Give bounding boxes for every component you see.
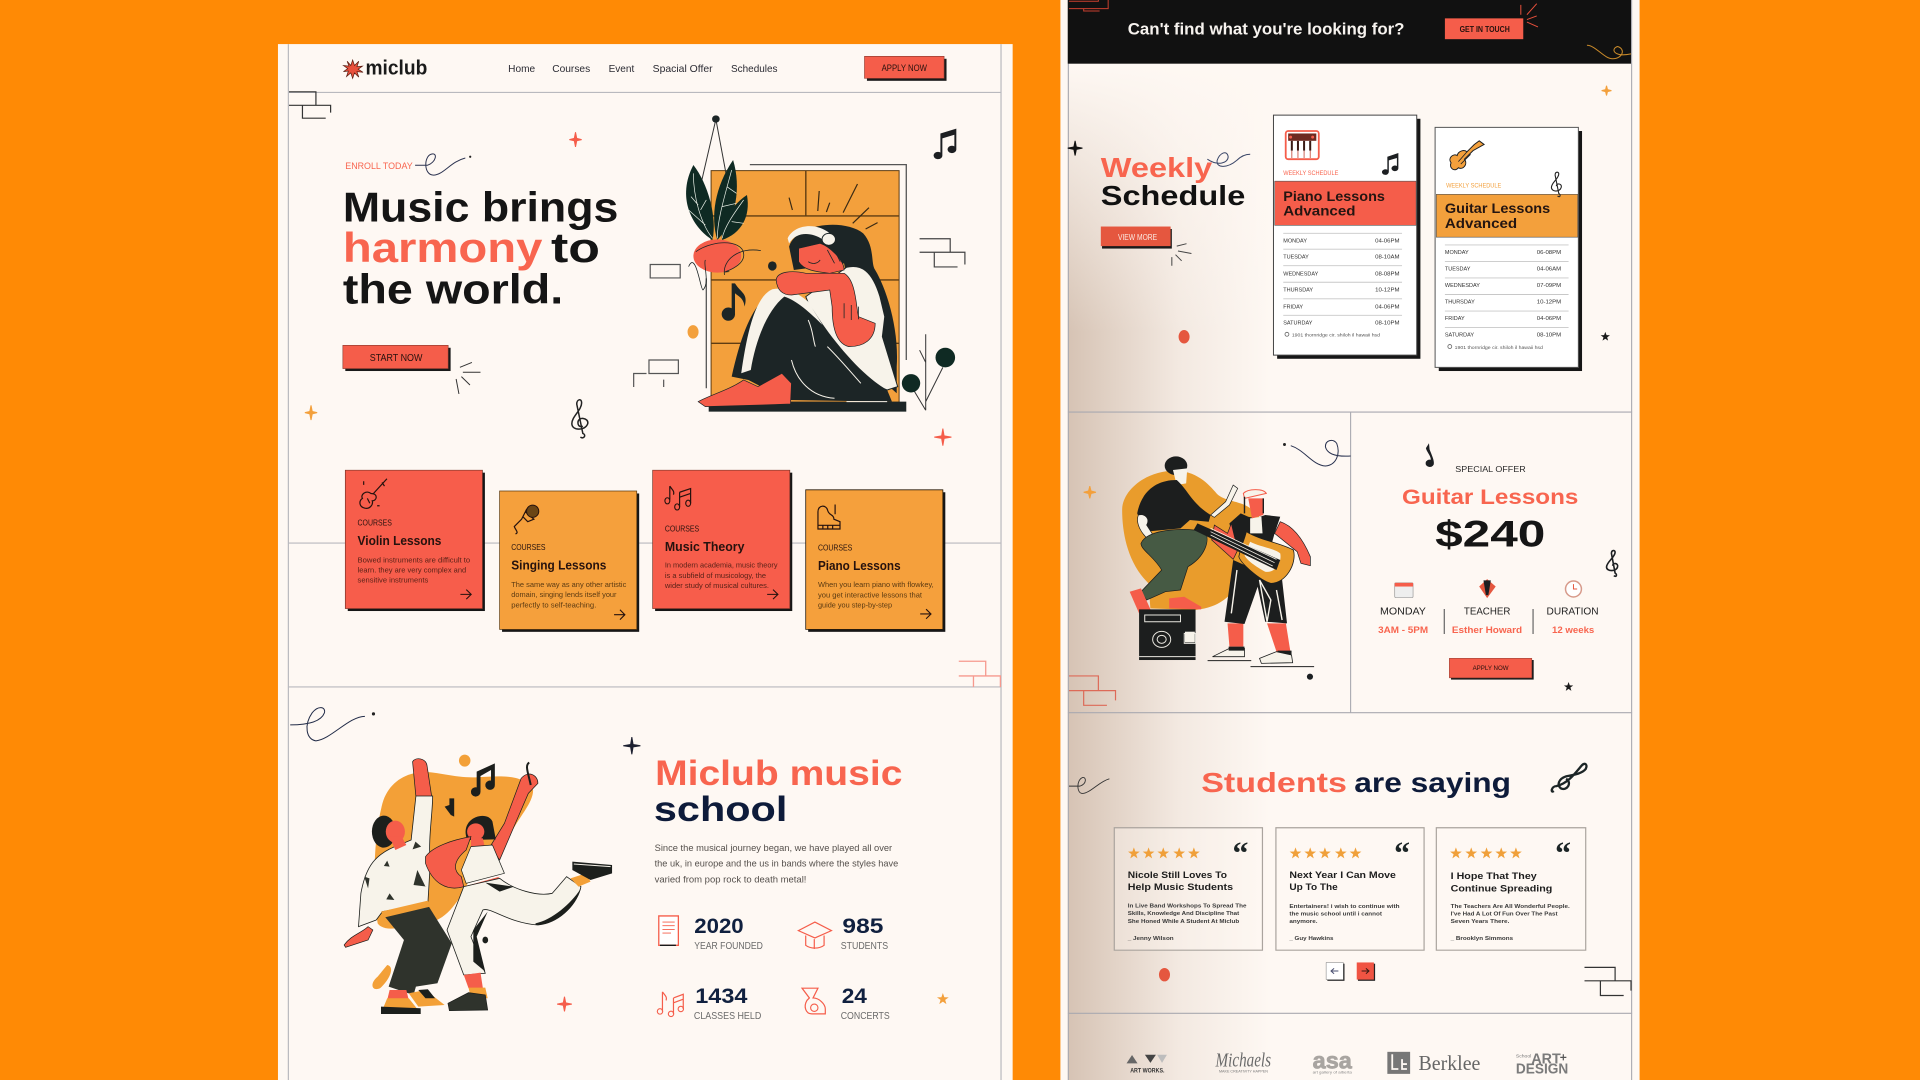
orange drop [688, 325, 699, 339]
arrow [767, 590, 778, 599]
nav links: Schedules [731, 64, 778, 75]
schedule card: piano: 10-12PM [1375, 287, 1400, 293]
button rays [456, 362, 480, 394]
card: violin lessons: COURSES [358, 518, 392, 527]
schedule card: guitar: MONDAY [1445, 250, 1469, 256]
card: singing lessons: The same way as any other artistic [511, 581, 627, 589]
bricks decoration pink [959, 661, 1000, 687]
schedule card: guitar: WEEKLY SCHEDULE [1446, 182, 1501, 189]
stat: year founded [659, 915, 763, 952]
view more button: VIEW MORE [1118, 233, 1157, 242]
testimonial three: The Teachers Are All Wonderful People. [1451, 904, 1570, 910]
weekly schedule heading [1101, 152, 1245, 249]
wall note [722, 283, 746, 321]
schedule card: guitar: WEDNESDAY [1445, 283, 1480, 289]
paragraph: varied from pop rock to death metal! [655, 874, 806, 885]
testimonial two: _ Guy Hawkins [1288, 936, 1333, 942]
banner: cant find: Can't find what you're looking for? [1128, 19, 1404, 38]
testimonial two: “ [1394, 835, 1410, 870]
icon: note [1382, 153, 1398, 175]
testimonial three: “ [1555, 835, 1571, 870]
testimonial one [1114, 828, 1262, 950]
card: piano lessons: COURSES [818, 543, 852, 552]
hero heading: harmony [343, 224, 542, 271]
heading: miclub music school: Miclub music [655, 753, 902, 793]
schedule card: guitar: 07-09PM [1537, 283, 1562, 289]
icon: note [1426, 443, 1434, 467]
stats [657, 915, 890, 1022]
schedule facts: TEACHER [1464, 607, 1510, 618]
icon: violin [360, 479, 387, 508]
hero heading: to [551, 224, 600, 271]
weekly schedule heading: Schedule [1101, 180, 1245, 211]
schedule card: guitar [1435, 127, 1582, 371]
stars [1128, 847, 1200, 858]
schedule facts: DURATION [1547, 607, 1599, 618]
card: singing lessons: Singing Lessons [511, 557, 606, 572]
headphones and face [788, 226, 830, 243]
stat: concerts: 24 [842, 985, 867, 1008]
testimonial one: _ Jenny Wilson [1127, 936, 1174, 942]
students heading: Students [1201, 767, 1347, 798]
schedule card: guitar: 1901 thornridge cir. shiloh il hawaii hsd [1455, 345, 1543, 350]
woman [490, 774, 538, 860]
stat: students [798, 915, 889, 952]
card: music theory: Music Theory [665, 539, 745, 554]
icon: calendar [1395, 583, 1413, 598]
hero heading: Music brings [343, 184, 618, 231]
logo: miclub [366, 58, 427, 80]
schedule card: guitar: SATURDAY [1445, 333, 1474, 339]
testimonial two: Entertainers! i wish to continue with [1289, 904, 1400, 910]
swirl weekly [1207, 153, 1250, 166]
paragraph: Since the musical journey began, we have played all over [655, 843, 893, 854]
schedule card: piano: 08-10AM [1375, 254, 1400, 260]
testimonial three: _ Brooklyn Simmons [1450, 936, 1513, 942]
testimonial one: Nicole Still Loves To [1128, 870, 1227, 880]
testimonial two: Next Year I Can Move [1289, 870, 1396, 880]
apply now button: APPLY NOW [1473, 665, 1509, 672]
special offer: Guitar Lessons [1402, 486, 1578, 509]
testimonial three: I've Had A Lot Of Fun Over The Past [1451, 912, 1558, 918]
stat: classes held [657, 985, 761, 1022]
card: music theory: is a subfield of musicology, the [665, 572, 766, 580]
logo: art and design [1516, 1051, 1568, 1077]
swirl banner [1587, 45, 1631, 59]
arrow [614, 610, 625, 620]
icon: treble clef tilted [1552, 764, 1587, 792]
card: singing lessons: perfectly to self-teaching. [511, 601, 596, 609]
stat: concerts: CONCERTS [841, 1011, 890, 1022]
swirl testimonials [1069, 777, 1109, 793]
schedule card: piano: FRIDAY [1283, 305, 1303, 311]
card: piano lessons [806, 490, 945, 632]
icon: clock [1566, 581, 1581, 597]
panel: landing page right [1060, 0, 1640, 1080]
left gradient tint [1068, 64, 1270, 1080]
illustration: hanging plant [686, 115, 761, 290]
schedule facts: MONDAY [1380, 607, 1426, 618]
amp [1139, 609, 1196, 660]
logo: art works [1127, 1055, 1167, 1075]
logo: art and design: ART [1531, 1051, 1561, 1067]
card: violin lessons: Violin Lessons [358, 533, 441, 548]
testimonial one: “ [1232, 835, 1248, 870]
schedule card: guitar: FRIDAY [1445, 316, 1465, 322]
logo: berklee [1387, 1051, 1480, 1075]
weekly schedule heading: Weekly [1101, 152, 1213, 183]
apply now button [864, 56, 947, 81]
apply now button [1449, 658, 1534, 680]
card: singing lessons: domain, singing lends itself your [511, 591, 617, 599]
icon: treble clef [1551, 172, 1561, 197]
bricks decoration top left [289, 92, 331, 118]
schedule card: guitar: Advanced [1445, 215, 1517, 231]
paragraph [655, 843, 898, 885]
schedule card: piano: MONDAY [1283, 238, 1307, 244]
testimonial one: Help Music Students [1128, 882, 1233, 892]
card: music theory: In modern academia, music theory [665, 562, 778, 570]
heading: miclub music school [654, 753, 902, 829]
testimonial two: the music school until i cannot [1289, 912, 1382, 918]
arrow [920, 609, 931, 619]
schedule facts: Esther Howard [1452, 625, 1522, 635]
special offer: SPECIAL OFFER [1455, 464, 1526, 474]
schedule card: piano: 08-08PM [1375, 272, 1400, 278]
schedule card: piano: SATURDAY [1283, 320, 1313, 326]
get in touch button [1445, 18, 1523, 39]
card: piano lessons: Piano Lessons [818, 558, 901, 573]
coat [806, 266, 898, 390]
logo: michaels: Michaels [1215, 1051, 1271, 1072]
special offer: $240 [1435, 514, 1545, 555]
panel: landing page left [278, 44, 1013, 1080]
arm [776, 272, 875, 347]
logo: asa: asa [1313, 1047, 1353, 1073]
icon: guitar [1450, 141, 1484, 170]
logo: michaels: MAKE CREATIVITY HAPPEN [1219, 1070, 1269, 1074]
partner logos [1127, 1047, 1568, 1077]
schedule card: guitar: 08-10PM [1537, 333, 1562, 339]
illustration: two dancers [344, 755, 612, 1014]
icon: music notes [670, 486, 691, 507]
stat: concerts [802, 985, 890, 1022]
stat: classes held: 1434 [695, 985, 748, 1008]
paragraph: the uk, in europe and the us in bands where the styles have [655, 859, 898, 870]
testimonial one: Skills, Knowledge And Discipline That [1128, 911, 1239, 917]
schedule card: piano: 04-06PM [1375, 305, 1400, 311]
pants [732, 289, 892, 402]
stat: students: STUDENTS [841, 941, 889, 952]
testimonial two: anymore. [1289, 919, 1318, 925]
pagination arrows [1326, 962, 1375, 981]
schedule card: piano [1273, 115, 1420, 359]
logo: asa: art gallery of alberta [1313, 1071, 1353, 1075]
apply now button: APPLY NOW [882, 63, 927, 73]
man [413, 759, 432, 797]
card: singing lessons [500, 491, 639, 632]
decorations right panel [1068, 86, 1631, 996]
nav links [508, 64, 778, 75]
special offer [1378, 443, 1618, 680]
students heading [1201, 767, 1511, 798]
schedule facts [1378, 607, 1599, 635]
guitar [1239, 532, 1294, 583]
schedule card: guitar: Guitar Lessons [1445, 200, 1550, 216]
bricks decoration right of hero [920, 239, 965, 267]
plus stars [305, 132, 951, 1011]
card: violin lessons [345, 470, 485, 611]
stat: year founded: YEAR FOUNDED [694, 941, 763, 952]
banner: cant find [1068, 0, 1631, 64]
schedule card: guitar: THURSDAY [1445, 300, 1475, 306]
card: piano lessons: guide you step-by-step [818, 601, 892, 609]
illustration: two guitar players [1122, 456, 1314, 667]
stat: classes held: CLASSES HELD [694, 1011, 761, 1022]
schedule card: piano: TUESDAY [1283, 254, 1309, 260]
testimonial two: Up To The [1289, 882, 1338, 892]
students heading: are saying [1354, 767, 1511, 798]
card: piano lessons: you get interactive lessons that [818, 591, 922, 599]
hair and back [789, 225, 897, 393]
swirl near guitar [1291, 440, 1351, 466]
card: music theory: COURSES [665, 524, 699, 533]
icon: treble clef [1607, 551, 1618, 576]
arrow [460, 590, 471, 599]
testimonial three [1436, 828, 1586, 950]
card: singing lessons: COURSES [511, 543, 546, 552]
icon: teacher [1479, 579, 1496, 598]
card: piano lessons: When you learn piano with flowkey, [818, 581, 934, 589]
card: music theory [653, 470, 792, 611]
card: music theory: wider study of musical cultures. [664, 582, 769, 590]
testimonial two [1276, 828, 1424, 950]
schedule card: piano: WEEKLY SCHEDULE [1283, 170, 1338, 177]
testimonial three: Continue Spreading [1451, 883, 1553, 893]
logo: art and design: School [1516, 1053, 1531, 1059]
get in touch button: GET IN TOUCH [1460, 25, 1510, 34]
feet [698, 373, 791, 407]
hero heading [343, 184, 618, 313]
start now button: START NOW [370, 353, 423, 364]
hero heading: the world. [343, 266, 563, 313]
stars [1450, 847, 1522, 858]
stat: year founded: 2020 [694, 915, 744, 938]
testimonial three: Seven Years There. [1451, 919, 1510, 925]
logo: berklee: Berklee [1418, 1051, 1480, 1075]
view more button [1101, 227, 1172, 249]
card: violin lessons: sensitive instruments [358, 577, 429, 585]
schedule facts: 3AM - 5PM [1378, 625, 1428, 635]
schedule card: piano: 08-10PM [1375, 320, 1400, 326]
icon: microphone [514, 507, 535, 534]
schedule card: guitar: 10-12PM [1537, 300, 1562, 306]
player sitting on amp [1165, 456, 1187, 475]
icon: keyboard [1286, 131, 1319, 159]
testimonial three: I Hope That They [1451, 871, 1538, 881]
stars [1290, 847, 1361, 858]
logo: art works: ART WORKS. [1130, 1068, 1165, 1075]
icon: treble clef hero [572, 400, 588, 438]
bricks decoration small [634, 264, 680, 387]
nav links: Event [609, 64, 634, 75]
schedule card: guitar: 06-08PM [1537, 250, 1562, 256]
notes [471, 763, 495, 797]
schedule card: piano: Advanced [1283, 203, 1356, 219]
icon: leaf twig [902, 334, 955, 410]
testimonial one: In Live Band Workshops To Spread The [1128, 903, 1247, 909]
swirl section two [290, 708, 365, 741]
card: violin lessons: learn. they are very complex and [358, 567, 466, 575]
eyebrow: ENROLL TODAY [345, 161, 413, 171]
nav links: Home [508, 64, 535, 75]
nav links: Courses [552, 64, 590, 75]
schedule card: piano: WEDNESDAY [1283, 272, 1319, 278]
schedule card: piano: THURSDAY [1283, 287, 1313, 293]
schedule facts: 12 weeks [1552, 625, 1594, 635]
testimonial one: She Honed While A Student At Miclub [1128, 919, 1240, 925]
schedule card: guitar: 04-06PM [1537, 316, 1562, 322]
icon: piano [818, 504, 840, 529]
stat: students: 985 [842, 915, 883, 938]
hero text [343, 161, 618, 394]
nav bar [343, 56, 947, 81]
nav links: Spacial Offer [653, 64, 713, 75]
rays view more [1172, 244, 1191, 266]
course cards [345, 470, 945, 632]
guitar player standing [1228, 623, 1243, 647]
icon: beamed note top right [934, 129, 956, 159]
orange star [937, 993, 949, 1004]
schedule card: guitar: 04-06AM [1537, 267, 1562, 273]
swirl near eyebrow [415, 154, 465, 175]
heading: miclub music school: school [654, 789, 787, 829]
illustration: woman listening to music in a window [698, 165, 906, 412]
schedule card: piano: Piano Lessons [1283, 188, 1385, 204]
testimonial cards [1114, 828, 1586, 950]
card: violin lessons: Bowed instruments are difficult to [358, 557, 470, 565]
logo: art and design: DESIGN [1516, 1061, 1568, 1077]
schedule card: piano: 1901 thornridge cir. shiloh il hawaii hsd [1292, 333, 1380, 338]
schedule card: piano: 04-06PM [1375, 238, 1400, 244]
start now button [343, 345, 451, 371]
bricks in banner [1069, 0, 1108, 11]
schedule card: guitar: TUESDAY [1445, 267, 1471, 273]
